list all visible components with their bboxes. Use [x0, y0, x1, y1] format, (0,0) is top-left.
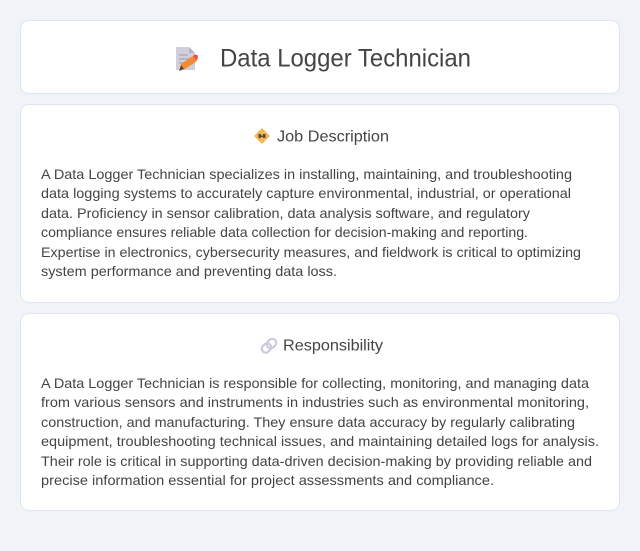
panel: responsibility	[20, 314, 620, 510]
text block: responsibility	[41, 375, 599, 488]
text block: job description: data logging systems to accurately capture environmental, industrial, or operational	[41, 185, 571, 201]
icon: diamond road sign	[254, 128, 270, 144]
text block: job description: compliance ensures reliable data collection for decision-making and reporting.	[41, 224, 528, 240]
title: Data Logger Technician	[220, 44, 471, 72]
text block: responsibility: from various sensors and instruments in industries such as environmental monitoring,	[41, 394, 589, 410]
text block: responsibility: precise information essential for project assessments and compliance.	[41, 472, 494, 488]
heading: job description: Job Description	[277, 128, 389, 146]
text block: job description: A Data Logger Technician specializes in installing, maintaining, and troubleshooting	[41, 166, 572, 182]
icon: document with pencil	[176, 47, 198, 71]
text block: job description: Expertise in electronics, cybersecurity measures, and fieldwork is critical to optimizing	[41, 244, 581, 260]
panel: job description	[20, 104, 620, 302]
text block: job description: data. Proficiency in sensor calibration, data analysis software, and regulatory	[41, 205, 530, 221]
text block: responsibility: equipment, troubleshooting technical issues, and maintaining detailed logs for analysis.	[41, 433, 599, 449]
text block: job description: system performance and preventing data loss.	[41, 263, 337, 279]
text block: responsibility: Their role is critical in supporting data-driven decision-making by providing reliable and	[41, 453, 592, 469]
text block: responsibility: A Data Logger Technician is responsible for collecting, monitoring, and managing data	[41, 375, 589, 391]
text block: responsibility: construction, and manufacturing. They ensure data accuracy by regularly calibrating	[41, 414, 575, 430]
text block: job description	[41, 166, 581, 279]
icon: chain link	[260, 337, 278, 354]
panel: title card	[20, 20, 620, 94]
heading: responsibility: Responsibility	[283, 338, 383, 354]
